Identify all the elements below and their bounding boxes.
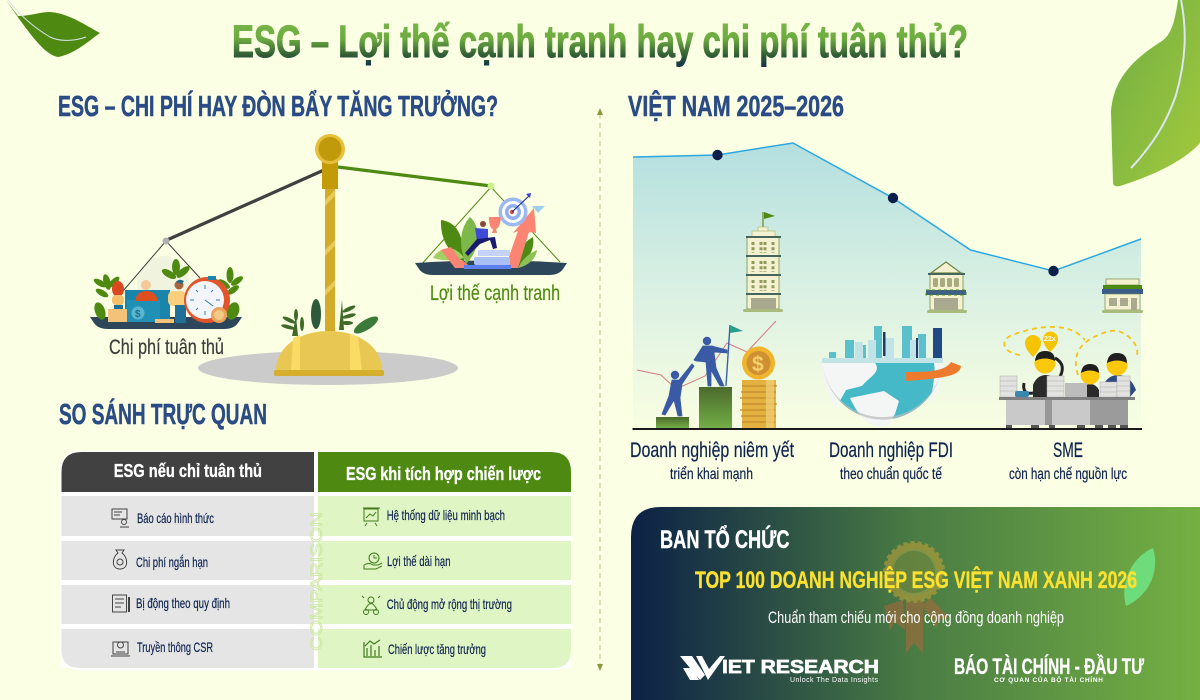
organizer panel <box>631 507 1200 700</box>
comparison table <box>60 451 572 670</box>
coins <box>108 307 227 323</box>
scale illustration <box>167 134 491 385</box>
dashed thought lines <box>1004 327 1137 375</box>
column header: compliance only <box>62 452 314 492</box>
row left 2: Chi phí ngắn hạn <box>136 554 208 570</box>
target <box>498 193 545 226</box>
icon: growth chart <box>364 640 382 657</box>
vertical watermark: comparison: COMPARISON <box>307 512 326 651</box>
people <box>112 280 186 323</box>
icon: FDI building <box>926 262 967 313</box>
heading: organizers: BAN TỔ CHỨC <box>660 524 790 554</box>
row right 4: Chiến lược tăng trưởng <box>388 641 486 657</box>
label: listed companies <box>630 439 794 483</box>
stopwatch <box>184 276 230 323</box>
heading: left section: ESG – CHI PHÍ HAY ĐÒN BẨY TĂNG TRƯỞNG? <box>58 89 498 123</box>
leaf accent <box>1124 548 1155 606</box>
icon: market people <box>362 596 380 614</box>
plants at scale base <box>281 299 381 337</box>
table frame <box>60 451 572 670</box>
row right 3 <box>318 585 571 624</box>
icon: leaf top left <box>6 0 100 57</box>
label: competitive advantage: Lợi thế cạnh tranh <box>430 282 560 305</box>
row left 3: Bị động theo quy định <box>136 595 230 611</box>
scale dome base <box>274 331 384 376</box>
logo: Viet Research: Unlock The Data Insights <box>790 677 878 684</box>
column header: strategic integration <box>318 452 571 492</box>
scale beam left <box>167 170 324 240</box>
leaves <box>92 259 244 322</box>
row right 2: Lợi thế dài hạn <box>387 553 450 569</box>
row right 1: Hệ thống dữ liệu minh bạch <box>387 507 505 523</box>
desk <box>999 397 1135 428</box>
scale base shadow <box>198 351 458 385</box>
scale head <box>315 134 345 189</box>
paper stacks <box>1000 376 1130 397</box>
column header: strategic integration: ESG khi tích hợp chiến lược <box>346 464 541 484</box>
icon: data board <box>363 508 380 526</box>
trophy <box>489 217 501 233</box>
row left 1 <box>62 496 314 536</box>
icon: report <box>112 509 129 527</box>
scale beam right <box>338 167 491 186</box>
data points <box>712 150 1059 276</box>
steps <box>656 387 732 428</box>
row right 3: Chủ động mở rộng thị trường <box>387 596 512 612</box>
area chart <box>633 143 1141 429</box>
row left 2 <box>62 541 314 580</box>
divider arrow <box>597 108 603 671</box>
pan <box>415 260 567 275</box>
row right 1 <box>318 496 571 536</box>
label: SME <box>1009 439 1127 483</box>
icon: tall building <box>743 212 783 312</box>
globe ocean <box>822 363 943 420</box>
left pan: compliance cost <box>90 238 244 359</box>
row left 4: Truyền thông CSR <box>137 639 213 655</box>
speech badges: 22x <box>1044 336 1056 343</box>
chart baseline <box>632 428 1142 430</box>
orange arrow <box>906 362 961 381</box>
skyline <box>822 326 943 364</box>
icon: SME shop <box>1102 279 1143 313</box>
illustration: listed companies climbing <box>637 321 777 428</box>
pale dome <box>137 256 189 308</box>
label: SME: SME <box>1053 439 1083 462</box>
row left 4 <box>62 629 314 668</box>
flag <box>726 325 743 386</box>
globe shading <box>822 363 943 420</box>
row left 3 <box>62 585 314 624</box>
pan strings <box>420 187 560 266</box>
icon: laptop csr <box>111 642 130 656</box>
right pan: competitive advantage <box>415 182 567 305</box>
panel background <box>631 507 1200 700</box>
heading: right section: VIỆT NAM 2025–2026 <box>628 89 844 123</box>
pivot <box>162 238 170 244</box>
logo: Bao Tai Chinh Dau Tu <box>954 654 1145 684</box>
person lower <box>662 364 694 416</box>
label: compliance cost: Chi phí tuân thủ <box>109 336 224 359</box>
illustration: SME overwhelmed office <box>999 327 1137 428</box>
money box <box>125 290 170 322</box>
label: FDI companies: Doanh nghiệp FDI <box>829 439 953 462</box>
column header: compliance only: ESG nếu chỉ tuân thủ <box>114 461 262 481</box>
pivot <box>488 182 494 190</box>
icon: notebook <box>112 595 129 612</box>
pan strings <box>123 241 200 291</box>
big leaves <box>433 217 537 268</box>
label: FDI companies <box>829 439 953 483</box>
scale pole <box>325 188 335 332</box>
row right 4 <box>318 629 571 668</box>
row right 2 <box>318 541 571 580</box>
money box: $ <box>135 309 141 320</box>
pan <box>90 317 242 329</box>
white land masses <box>822 363 943 427</box>
icon: hand with clock <box>364 553 382 569</box>
big dollar coin: $ <box>752 353 764 376</box>
label: listed companies: Doanh nghiệp niêm yết <box>630 439 794 462</box>
coin stack <box>740 380 777 428</box>
runner <box>465 221 497 256</box>
laptop <box>1065 383 1087 397</box>
books <box>464 250 511 269</box>
logo: Bao Tai Chinh Dau Tu: CƠ QUAN CỦA BỘ TÀI CHÍNH <box>994 675 1103 684</box>
phone <box>1015 391 1029 397</box>
icon: money bag <box>113 550 127 569</box>
row left 1: Báo cáo hình thức <box>137 510 214 526</box>
growth line <box>637 321 776 389</box>
heading: visual comparison: SO SÁNH TRỰC QUAN <box>59 397 267 431</box>
office workers <box>1024 351 1136 397</box>
label: listed companies: triển khai mạnh <box>670 465 753 483</box>
logo: Viet Research: IET RESEARCH <box>722 657 879 677</box>
tagline: Chuẩn tham chiếu mới cho cộng đồng doanh nghiệp <box>768 608 1064 627</box>
illustration: globe with skyline <box>822 326 961 427</box>
icon: leaf top right <box>1111 0 1200 186</box>
logo: Viet Research <box>680 656 879 684</box>
medal watermark <box>884 543 949 653</box>
area fill <box>633 143 1141 429</box>
person upper <box>694 337 727 386</box>
label: SME: còn hạn chế nguồn lực <box>1009 466 1127 483</box>
label: FDI companies: theo chuẩn quốc tế <box>840 465 942 483</box>
trend line <box>633 143 1141 271</box>
growth arrows <box>441 208 536 268</box>
